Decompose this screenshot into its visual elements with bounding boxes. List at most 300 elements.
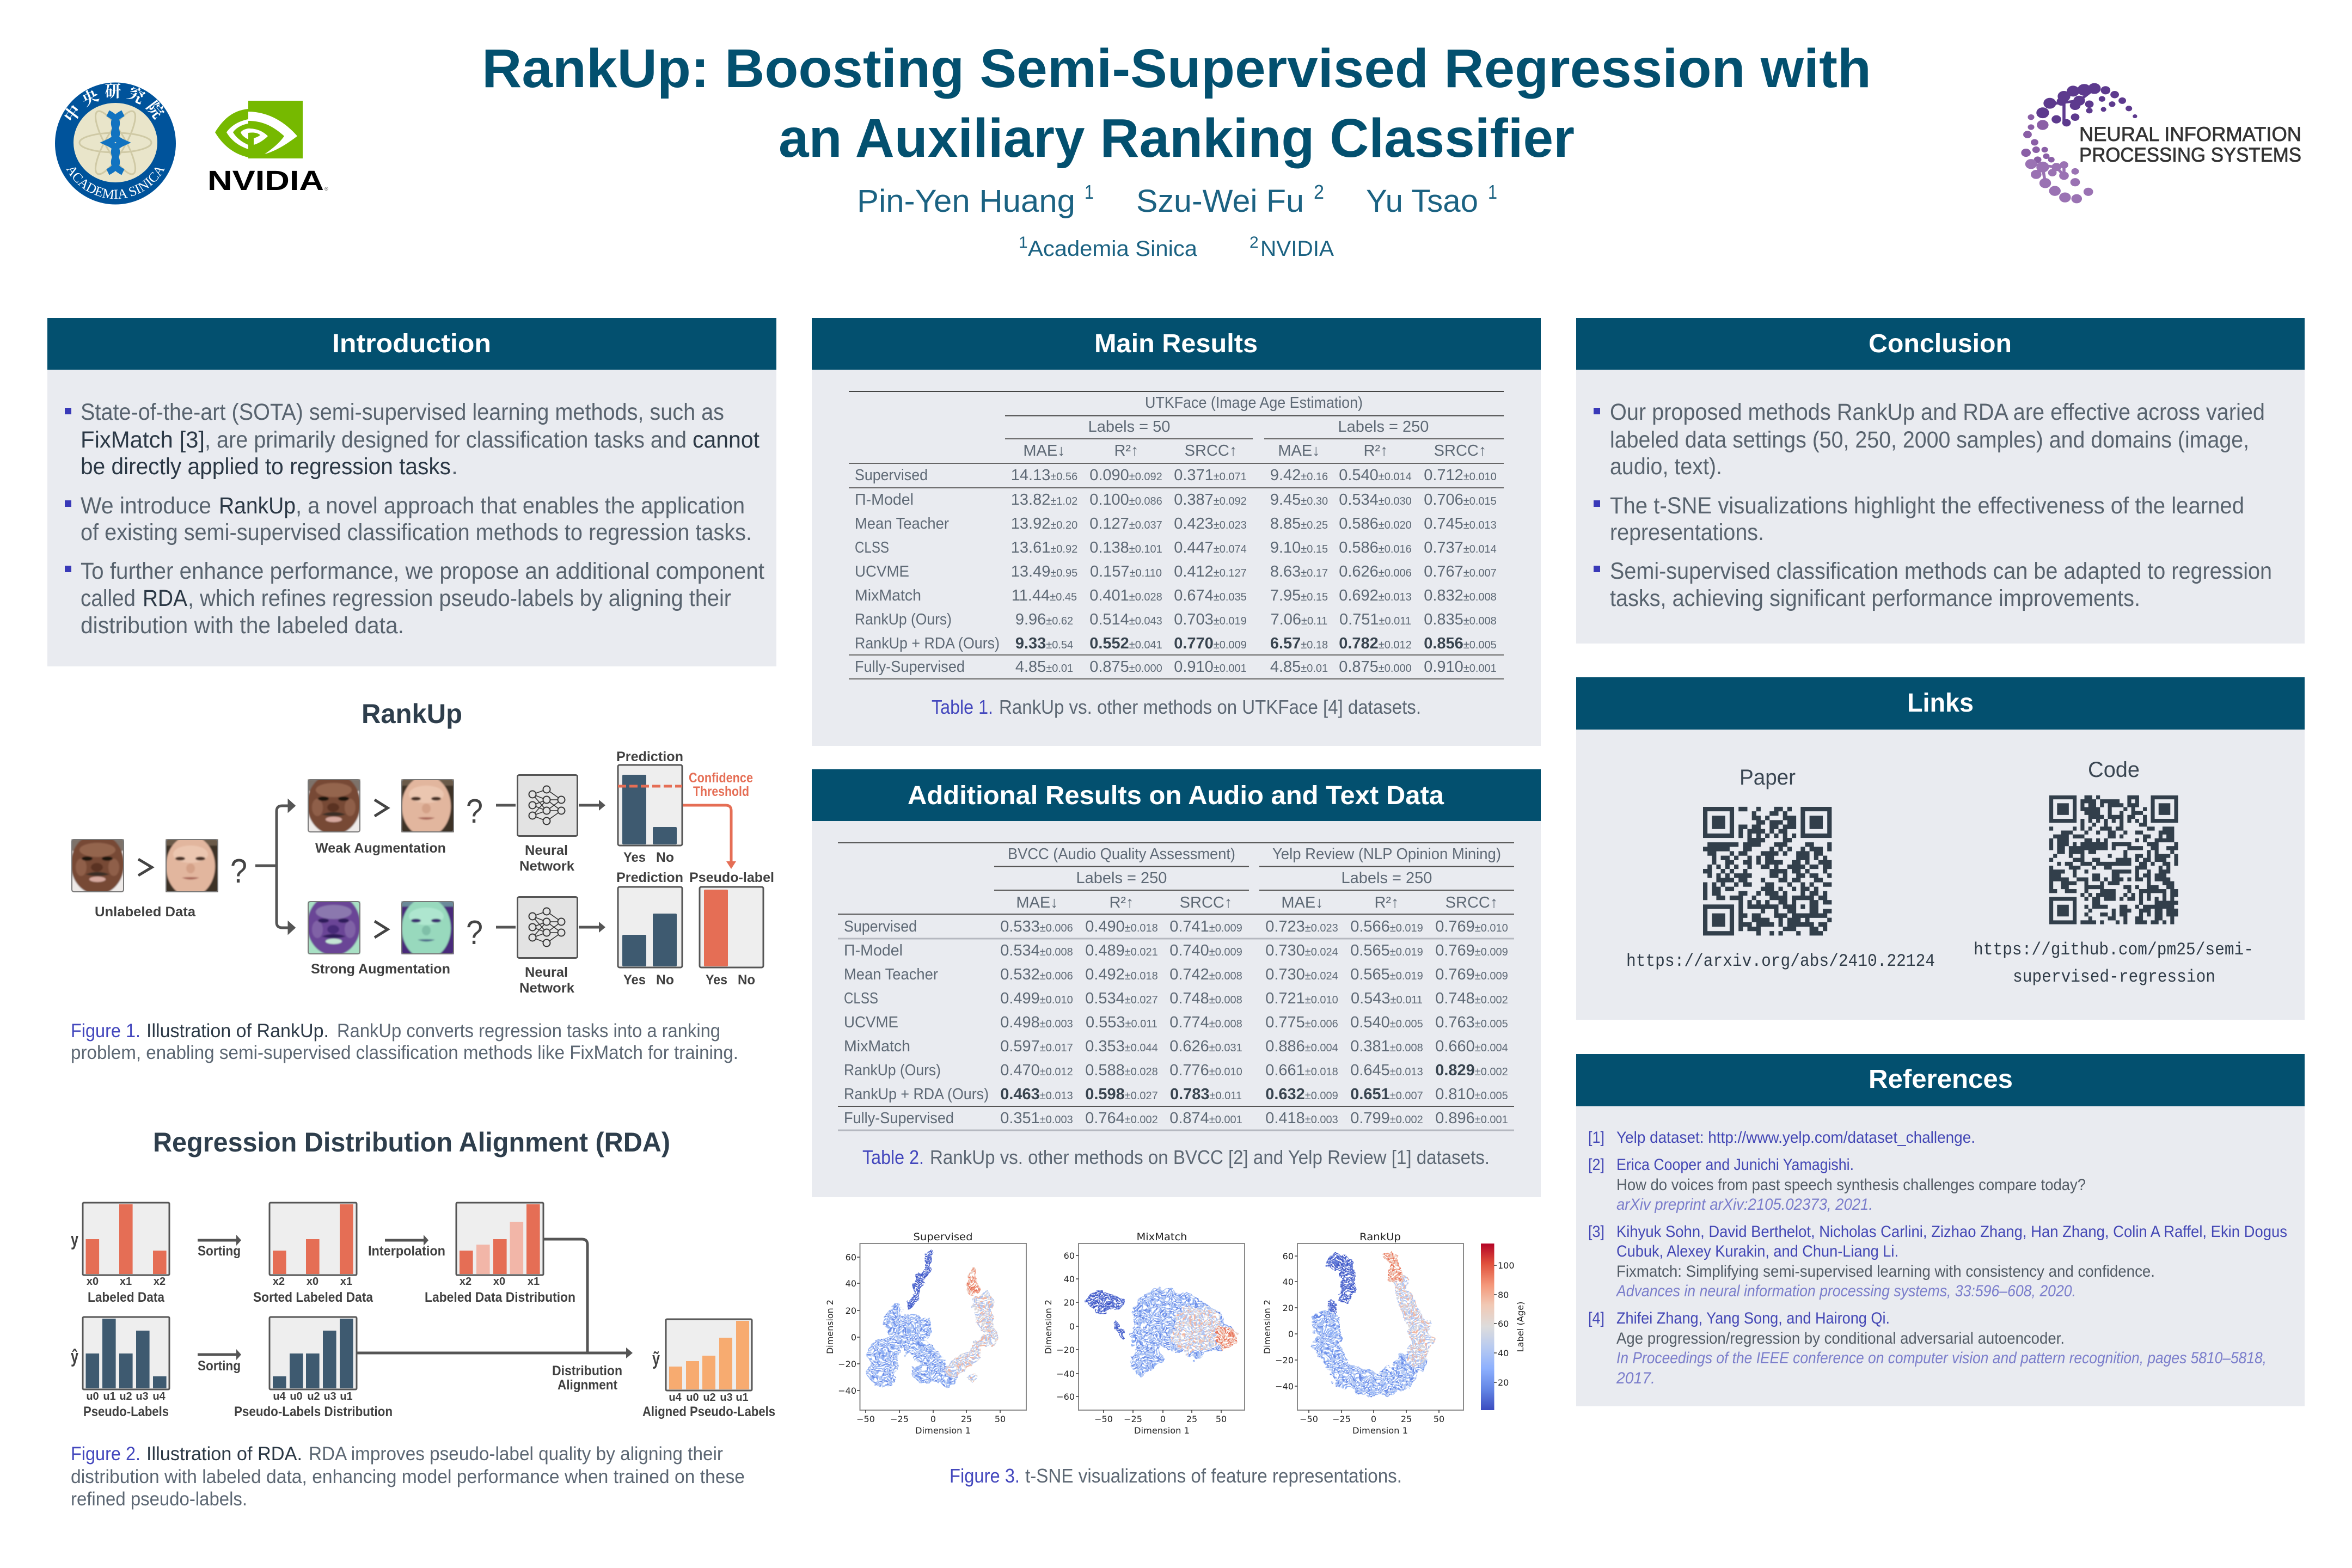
conclusion bullet 2: representations.: [1610, 519, 1764, 546]
row: RankUp (Ours): RankUp (Ours): [855, 611, 952, 628]
plot: Supervised: 20: [846, 1306, 856, 1316]
neural network bottom: [496, 897, 605, 996]
row: UCVME: UCVME: [855, 563, 909, 580]
plot: MixMatch: Dimension 2: [1043, 1300, 1054, 1354]
colorbar: 20: [1498, 1377, 1509, 1388]
authors: Szu-Wei Fu: [1136, 183, 1304, 219]
plot: Supervised: −50: [856, 1414, 875, 1424]
link: paper: [1626, 765, 1935, 971]
authors: 1: [1085, 181, 1094, 203]
caption: figure 3: t-SNE visualizations of feature representations.: [1025, 1465, 1402, 1487]
row: Supervised: 14.13±0.56: [1011, 467, 1077, 484]
table 2 header: BVCC (Audio Quality Assessment): [1008, 846, 1235, 863]
reference 4: [1588, 1309, 2267, 1387]
flow connectors: Alignment: [558, 1377, 618, 1393]
plot: Supervised: 50: [995, 1414, 1006, 1424]
chart: labeled data: Labeled Data: [88, 1290, 165, 1305]
plot: Supervised: −20: [838, 1359, 856, 1369]
row: RankUp (Ours): [844, 1062, 1508, 1079]
table 2 header: Labels = 250: [1076, 869, 1167, 887]
plot: RankUp: 0: [1371, 1414, 1376, 1424]
row: MixMatch: 0.886±0.004: [1265, 1038, 1338, 1055]
pseudo-label chart: No: [738, 972, 755, 988]
plot: RankUp: Dimension 1: [1352, 1425, 1408, 1436]
link: code: [1974, 758, 2253, 987]
heading: RankUp: RankUp: [362, 699, 462, 729]
table 2 header: MAE↓: [1281, 894, 1324, 911]
row: MixMatch: 0.401±0.028: [1089, 587, 1162, 604]
row: UCVME: 0.157±0.110: [1090, 563, 1162, 580]
pseudo-label chart: [689, 870, 774, 988]
reference 2: [1588, 1156, 2086, 1214]
row: UCVME: 0.775±0.006: [1265, 1014, 1338, 1031]
row: CLSS: 0.543±0.011: [1351, 990, 1423, 1007]
bullet 1: [65, 399, 759, 480]
row: CLSS: 0.499±0.010: [1000, 990, 1073, 1007]
row: Fully-Supervised: 0.351±0.003: [1000, 1110, 1073, 1127]
authors: 2: [1314, 181, 1324, 203]
row: MixMatch: 0.692±0.013: [1339, 587, 1412, 604]
chart: labeled data: x2: [154, 1276, 166, 1288]
row: CLSS: 0.534±0.027: [1085, 990, 1158, 1007]
chart: sorted labeled data: x1: [340, 1276, 352, 1288]
row: MixMatch: 0.674±0.035: [1174, 587, 1247, 604]
chart: pseudo-labels distribution: u1: [340, 1391, 353, 1402]
panel: links: [1576, 677, 2305, 1020]
row: MixMatch: MixMatch: [855, 587, 921, 604]
row: Π-Model: 13.82±1.02: [1011, 491, 1077, 509]
row: Supervised: 0.566±0.019: [1350, 918, 1423, 935]
plot: MixMatch: −50: [1094, 1414, 1113, 1424]
plot: MixMatch: 40: [1064, 1274, 1075, 1284]
row: Π-Model: 0.534±0.008: [1000, 942, 1073, 959]
plot: MixMatch: 20: [1064, 1297, 1075, 1308]
colorbar: [1481, 1244, 1526, 1410]
plot: Supervised: Supervised: [914, 1231, 972, 1243]
row: CLSS: 0.138±0.101: [1089, 539, 1162, 556]
plot: RankUp: 40: [1283, 1277, 1294, 1287]
plot: Supervised: Dimension 2: [825, 1300, 835, 1354]
caption: figure 2: Figure 2.: [71, 1443, 140, 1465]
prediction chart bottom: Prediction: [616, 870, 683, 885]
row: CLSS: CLSS: [844, 990, 878, 1007]
bullet 3: [65, 558, 764, 639]
row: CLSS: 0.721±0.010: [1265, 990, 1338, 1007]
row: UCVME: [844, 1014, 1508, 1031]
conclusion bullet 1: Our proposed methods RankUp and RDA are effective across varied: [1610, 399, 2265, 425]
colorbar: Label (Age): [1515, 1301, 1526, 1352]
affiliations: [1019, 234, 1334, 261]
plot: Supervised: [825, 1231, 1026, 1436]
chart: pseudo-labels: u3: [136, 1391, 149, 1402]
reference 4: 2017.: [1616, 1369, 1655, 1387]
caption: figure 1: [71, 1020, 738, 1063]
plot: MixMatch: 0: [1160, 1414, 1166, 1424]
row: RankUp (Ours): RankUp (Ours): [844, 1062, 941, 1079]
row: CLSS: 9.10±0.15: [1270, 539, 1328, 556]
table 1 header: SRCC↑: [1434, 442, 1486, 460]
row: UCVME: 0.540±0.005: [1350, 1014, 1423, 1031]
confidence threshold: Threshold: [693, 784, 749, 799]
logo: Academia Sinica: 中央研究院: [64, 83, 164, 121]
link: paper: Paper: [1739, 765, 1796, 789]
row: Mean Teacher: Mean Teacher: [855, 515, 949, 532]
row: CLSS: CLSS: [855, 539, 889, 556]
row: Supervised: 0.723±0.023: [1265, 918, 1338, 935]
row: MixMatch: 0.597±0.017: [1000, 1038, 1073, 1055]
row: Π-Model: 0.387±0.092: [1174, 491, 1247, 509]
row: Supervised: Supervised: [844, 918, 917, 935]
plot: RankUp: 60: [1283, 1251, 1294, 1261]
reference 2: How do voices from past speech synthesis challenges compare today?: [1616, 1176, 2086, 1194]
row: RankUp + RDA (Ours): [855, 635, 1497, 652]
reference 4: Zhifei Zhang, Yang Song, and Hairong Qi.: [1616, 1309, 1890, 1327]
row: Π-Model: Π-Model: [844, 942, 903, 959]
row: Π-Model: [844, 942, 1508, 959]
row: UCVME: 13.49±0.95: [1011, 563, 1077, 580]
reference 2: Erica Cooper and Junichi Yamagishi.: [1616, 1156, 1854, 1174]
row: Fully-Supervised: 0.910±0.001: [1424, 658, 1497, 676]
QR code: code: [2049, 798, 2178, 922]
bullet 1: , are primarily designed for classification tasks and: [205, 427, 687, 453]
conclusion bullet 3: [1594, 558, 2272, 611]
bullet 3: To further enhance performance, we propose an additional component: [81, 558, 764, 584]
plot: Supervised: −25: [890, 1414, 909, 1424]
row: MixMatch: 0.660±0.004: [1435, 1038, 1508, 1055]
unlabeled data faces: Unlabeled Data: [95, 904, 196, 920]
chart: pseudo-labels distribution: u4: [273, 1391, 286, 1402]
chart: labeled data distribution: x1: [528, 1276, 540, 1288]
conclusion bullet 1: [1594, 399, 2265, 480]
row: Supervised: 0.090±0.092: [1089, 467, 1162, 484]
table 2 header: Yelp Review (NLP Opinion Mining): [1272, 846, 1501, 863]
chart: labeled data: x1: [120, 1276, 132, 1288]
link: code: https://github.com/pm25/semi-: [1974, 940, 2253, 960]
plot: RankUp: RankUp: [1359, 1231, 1401, 1243]
chart: pseudo-labels: ŷ: [71, 1346, 78, 1367]
logo: Academia Sinica: ACADEMIA SINICA: [66, 168, 165, 199]
chart: aligned pseudo-labels: Aligned Pseudo-Labels: [642, 1404, 775, 1419]
conclusion bullet 1: audio, text).: [1610, 454, 1722, 480]
chart: aligned pseudo-labels: u2: [703, 1392, 716, 1404]
flow connectors: [198, 1235, 633, 1393]
chart: aligned pseudo-labels: [642, 1319, 775, 1419]
chart: pseudo-labels: Pseudo-Labels: [83, 1404, 169, 1419]
plot: Supervised: 0: [851, 1332, 856, 1343]
row: CLSS: 13.61±0.92: [1011, 539, 1077, 556]
row: Mean Teacher: 0.742±0.008: [1169, 966, 1242, 983]
chart: sorted labeled data: [253, 1203, 373, 1305]
table 2 header: SRCC↑: [1180, 894, 1232, 911]
prediction chart top: [616, 749, 683, 865]
affiliations: NVIDIA: [1260, 237, 1334, 261]
reference 1: Yelp dataset: http://www.yelp.com/dataset_challenge.: [1616, 1129, 1975, 1147]
flow connectors: Interpolation: [368, 1244, 445, 1259]
row: RankUp + RDA (Ours): 0.598±0.027: [1085, 1086, 1158, 1103]
row: Fully-Supervised: 4.85±0.01: [1015, 658, 1073, 676]
plot: RankUp: −25: [1332, 1414, 1351, 1424]
branch arrows: [255, 800, 295, 933]
row: RankUp (Ours): 7.06±0.11: [1271, 611, 1327, 628]
caption: figure 2: distribution with labeled data, enhancing model performance when trained on these: [71, 1466, 745, 1487]
plot: Supervised: −40: [838, 1386, 856, 1396]
logo: NVIDIA: [207, 101, 328, 196]
conclusion bullet 1: labeled data settings (50, 250, 2000 samples) and domains (image,: [1610, 427, 2249, 453]
affiliations: 1: [1019, 234, 1028, 252]
plot: Supervised: Dimension 1: [915, 1425, 971, 1436]
authors: 1: [1488, 181, 1497, 203]
row: Mean Teacher: Mean Teacher: [844, 966, 938, 983]
caption: figure 2: Illustration of RDA.: [146, 1443, 302, 1465]
affiliations: 2: [1250, 234, 1259, 252]
plot: RankUp: −50: [1300, 1414, 1318, 1424]
table 2 header: R²↑: [1109, 894, 1134, 911]
row: Fully-Supervised: 4.85±0.01: [1270, 658, 1328, 676]
row: UCVME: 0.412±0.127: [1174, 563, 1247, 580]
bullet 1: cannot: [693, 427, 759, 453]
row: UCVME: 0.774±0.008: [1169, 1014, 1242, 1031]
row: RankUp + RDA (Ours): 0.783±0.011: [1170, 1086, 1242, 1103]
chart: pseudo-labels distribution: u2: [307, 1391, 320, 1402]
row: Π-Model: 0.534±0.030: [1339, 491, 1412, 509]
table 2 header: Labels = 250: [1342, 869, 1432, 887]
row: Supervised: [844, 918, 1508, 935]
plot: MixMatch: −20: [1056, 1345, 1075, 1355]
row: RankUp (Ours): 0.645±0.013: [1350, 1062, 1423, 1079]
row: Supervised: 0.712±0.010: [1424, 467, 1497, 484]
colorbar: 40: [1498, 1348, 1509, 1358]
plot: MixMatch: −25: [1124, 1414, 1142, 1424]
title: [482, 38, 1871, 169]
figure 2: RDA diagram: [71, 1203, 775, 1419]
table 1 header: R²↑: [1363, 442, 1388, 460]
table 1 header: MAE↓: [1023, 442, 1065, 460]
prediction chart bottom: Yes: [623, 972, 646, 988]
row: Π-Model: 0.740±0.009: [1169, 942, 1242, 959]
row: RankUp (Ours): 9.96±0.62: [1015, 611, 1073, 628]
colorbar: 100: [1498, 1260, 1515, 1271]
heading: Introduction: [47, 318, 776, 370]
reference 2: [2]: [1588, 1156, 1604, 1174]
row: RankUp + RDA (Ours): 0.651±0.007: [1350, 1086, 1423, 1103]
row: Mean Teacher: 0.586±0.020: [1339, 515, 1412, 532]
plot: Supervised: 25: [961, 1414, 972, 1424]
chart: pseudo-labels: u0: [86, 1391, 99, 1402]
heading: References: [1576, 1054, 2305, 1106]
prediction chart bottom: No: [656, 972, 674, 988]
plot: MixMatch: Dimension 1: [1134, 1425, 1190, 1436]
heading: Links: Links: [1907, 689, 1974, 718]
table 1 header: R²↑: [1114, 442, 1139, 460]
row: Supervised: 0.533±0.006: [1000, 918, 1073, 935]
table 2: [838, 843, 1514, 1130]
chart: pseudo-labels: u1: [103, 1391, 116, 1402]
row: UCVME: 0.498±0.003: [1000, 1014, 1073, 1031]
row: RankUp + RDA (Ours): 9.33±0.54: [1015, 635, 1073, 652]
row: UCVME: [855, 563, 1497, 580]
table 1 header: Labels = 50: [1088, 418, 1170, 436]
bullet 1: FixMatch [3]: [81, 427, 205, 453]
row: Mean Teacher: 0.769±0.009: [1435, 966, 1508, 983]
bullet 3: , which refines regression pseudo-labels by aligning their: [188, 585, 731, 611]
heading: RDA: Regression Distribution Alignment (RDA): [153, 1127, 670, 1157]
row: Fully-Supervised: 0.764±0.002: [1085, 1110, 1158, 1127]
row: RankUp (Ours): 0.514±0.043: [1089, 611, 1162, 628]
chart: pseudo-labels distribution: u0: [290, 1391, 303, 1402]
logo: NeurIPS: PROCESSING SYSTEMS: [2079, 144, 2301, 166]
plot: RankUp: 0: [1288, 1329, 1294, 1339]
chart: pseudo-labels distribution: Pseudo-Labels Distribution: [234, 1404, 393, 1419]
prediction chart bottom: [616, 870, 683, 988]
caption: figure 2: [71, 1443, 745, 1510]
row: Supervised: [855, 467, 1497, 484]
chart: labeled data distribution: [425, 1203, 575, 1305]
chart: labeled data: x0: [87, 1276, 99, 1288]
chart: labeled data distribution: x0: [493, 1276, 505, 1288]
row: RankUp + RDA (Ours): 0.632±0.009: [1265, 1086, 1338, 1103]
row: Supervised: 0.540±0.014: [1339, 467, 1412, 484]
bullet 2: RankUp: [219, 493, 296, 519]
row: CLSS: 0.586±0.016: [1339, 539, 1412, 556]
row: RankUp + RDA (Ours): RankUp + RDA (Ours): [844, 1086, 989, 1103]
row: RankUp (Ours): 0.470±0.012: [1000, 1062, 1073, 1079]
conclusion bullet 3: Semi-supervised classification methods can be adapted to regression: [1610, 558, 2272, 584]
row: Π-Model: Π-Model: [855, 491, 914, 509]
row: CLSS: [855, 539, 1497, 556]
reference 3: [1588, 1223, 2287, 1300]
panel: references: [1576, 1054, 2305, 1406]
plot: Supervised: 0: [930, 1414, 936, 1424]
row: RankUp + RDA (Ours): 0.552±0.041: [1089, 635, 1162, 652]
plot: MixMatch: [1043, 1231, 1245, 1436]
confidence threshold: [683, 770, 753, 869]
heading: Conclusion: [1576, 318, 2305, 370]
row: RankUp + RDA (Ours): 0.782±0.012: [1339, 635, 1412, 652]
confidence threshold: Confidence: [689, 770, 753, 786]
row: Π-Model: 0.730±0.024: [1265, 942, 1338, 959]
neural network top: Network: [519, 859, 574, 874]
row: RankUp + RDA (Ours): 0.770±0.009: [1174, 635, 1247, 652]
row: Supervised: 0.490±0.018: [1085, 918, 1158, 935]
weak augmentation faces: [307, 774, 483, 856]
row: Supervised: 0.371±0.071: [1174, 467, 1247, 484]
panel: conclusion: [1576, 318, 2305, 644]
row: Mean Teacher: 0.730±0.024: [1265, 966, 1338, 983]
table 2 header: SRCC↑: [1445, 894, 1498, 911]
reference 3: Kihyuk Sohn, David Berthelot, Nicholas Carlini, Zizhao Zhang, Han Zhang, Colin A Raffel, Ekin Dogus: [1616, 1223, 2287, 1241]
row: Π-Model: 0.489±0.021: [1085, 942, 1158, 959]
row: Mean Teacher: 0.423±0.023: [1174, 515, 1247, 532]
colorbar: 80: [1498, 1290, 1509, 1300]
row: Fully-Supervised: Fully-Supervised: [844, 1110, 954, 1127]
row: Fully-Supervised: [855, 658, 1497, 676]
title: an Auxiliary Ranking Classifier: [779, 108, 1575, 169]
row: Fully-Supervised: [844, 1110, 1508, 1127]
plot: RankUp: −20: [1275, 1355, 1294, 1365]
figure 1: RankUp diagram: [71, 749, 774, 996]
chart: sorted labeled data: x2: [273, 1276, 285, 1288]
caption: table 2: RankUp vs. other methods on BVCC [2] and Yelp Review [1] datasets.: [930, 1146, 1490, 1168]
row: Π-Model: 0.769±0.009: [1435, 942, 1508, 959]
chart: sorted labeled data: Sorted Labeled Data: [253, 1290, 373, 1305]
bullet 2: of existing semi-supervised classification methods to regression tasks.: [81, 519, 752, 546]
authors: Yu Tsao: [1366, 183, 1478, 219]
reference 3: [3]: [1588, 1223, 1604, 1241]
row: Fully-Supervised: 0.896±0.001: [1435, 1110, 1508, 1127]
row: CLSS: [844, 990, 1508, 1007]
caption: figure 3: Figure 3.: [950, 1465, 1020, 1487]
plot: Supervised: 60: [846, 1252, 856, 1263]
row: RankUp (Ours): 0.776±0.010: [1169, 1062, 1242, 1079]
panel: main results: [812, 318, 1541, 746]
logo: NVIDIA: ®: [324, 186, 328, 192]
chart: pseudo-labels: u4: [152, 1391, 166, 1402]
row: MixMatch: 7.95±0.15: [1270, 587, 1328, 604]
row: UCVME: 0.626±0.006: [1339, 563, 1412, 580]
neural network top: [496, 775, 605, 874]
bullet 2: , a novel approach that enables the application: [296, 493, 745, 519]
conclusion bullet 2: [1594, 493, 2244, 546]
panel: additional results: [812, 769, 1541, 1197]
chart: sorted labeled data: x0: [307, 1276, 318, 1288]
figure 3: t-SNE plots: [825, 1231, 1526, 1436]
heading: References: References: [1869, 1065, 2013, 1094]
row: Supervised: 9.42±0.16: [1270, 467, 1328, 484]
row: RankUp (Ours): 0.703±0.019: [1174, 611, 1247, 628]
bullet 1: .: [451, 454, 458, 480]
row: Π-Model: 0.565±0.019: [1350, 942, 1423, 959]
title: RankUp: Boosting Semi-Supervised Regression with: [482, 38, 1871, 99]
row: UCVME: 0.763±0.005: [1435, 1014, 1508, 1031]
reference 4: [4]: [1588, 1309, 1604, 1327]
caption: figure 1: Illustration of RankUp.: [146, 1020, 329, 1042]
row: Supervised: 0.741±0.009: [1169, 918, 1242, 935]
chart: aligned pseudo-labels: u3: [720, 1392, 733, 1404]
flow connectors: Distribution: [552, 1363, 622, 1379]
row: Fully-Supervised: Fully-Supervised: [855, 658, 965, 676]
row: RankUp + RDA (Ours): 0.810±0.005: [1435, 1086, 1508, 1103]
plot: RankUp: 50: [1434, 1414, 1444, 1424]
heading: Additional Results: [812, 769, 1541, 821]
row: Fully-Supervised: 0.875±0.000: [1339, 658, 1412, 676]
plot: MixMatch: 60: [1064, 1251, 1075, 1261]
chart: labeled data distribution: x2: [460, 1276, 471, 1288]
plot: MixMatch: MixMatch: [1137, 1231, 1187, 1243]
neural network top: Neural: [525, 843, 568, 858]
reference 4: Age progression/regression by conditional adversarial autoencoder.: [1616, 1330, 2065, 1347]
conclusion bullet 3: tasks, achieving significant performance improvements.: [1610, 585, 2140, 611]
row: Mean Teacher: 0.565±0.019: [1350, 966, 1423, 983]
heading: Additional Results: Additional Results on Audio and Text Data: [908, 781, 1444, 810]
row: Mean Teacher: 0.127±0.037: [1089, 515, 1162, 532]
row: UCVME: 0.553±0.011: [1086, 1014, 1157, 1031]
link: code: supervised-regression: [2013, 967, 2215, 987]
bullet 3: RDA: [143, 585, 187, 611]
row: MixMatch: 0.832±0.008: [1424, 587, 1497, 604]
bullet 1: be directly applied to regression tasks: [81, 454, 451, 480]
link: code: Code: [2088, 758, 2140, 782]
row: Mean Teacher: 0.492±0.018: [1085, 966, 1158, 983]
row: RankUp (Ours): 0.751±0.011: [1339, 611, 1411, 628]
table 1 header: UTKFace (Image Age Estimation): [1145, 394, 1363, 412]
chart: labeled data: y: [71, 1229, 78, 1250]
weak augmentation faces: Weak Augmentation: [315, 841, 446, 856]
heading: Main Results: Main Results: [1094, 329, 1258, 358]
weak augmentation faces: ?: [466, 793, 483, 830]
table 1 header: MAE↓: [1278, 442, 1320, 460]
table 2 header: [1008, 846, 1501, 911]
row: RankUp + RDA (Ours): 0.463±0.013: [1000, 1086, 1073, 1103]
